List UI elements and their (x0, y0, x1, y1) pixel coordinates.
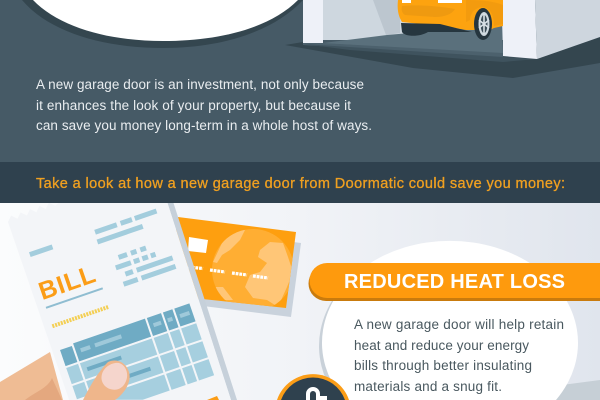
heading banner: reduced heat loss: REDUCED HEAT LOSS (344, 271, 565, 293)
heading banner: reduced heat loss (309, 263, 600, 301)
text bubble (319, 241, 578, 400)
illustration: credit card (165, 217, 301, 317)
icon: thermometer badge (277, 374, 349, 400)
illustration: bill receipt (8, 203, 237, 400)
body text: reduced heat loss: heat and reduce your energy (354, 338, 529, 353)
intro paragraph (36, 77, 372, 133)
hero white ellipse with shadow (22, 0, 303, 48)
bill date (52, 307, 108, 326)
body text: reduced heat loss: bills through better insulating (354, 358, 532, 373)
band heading: Take a look at how a new garage door from Doormatic could save you money: (36, 176, 565, 192)
body text: reduced heat loss (354, 317, 564, 394)
panel: intro dark section (0, 0, 600, 163)
intro paragraph: can save you money long-term in a whole host of ways. (36, 118, 372, 133)
orange corner (207, 396, 219, 400)
bill header lines (29, 209, 176, 287)
intro paragraph: A new garage door is an investment, not only because (36, 77, 364, 92)
illustration: hand holding bill (0, 352, 130, 400)
car (398, 0, 503, 40)
panel: reduced heat loss section background (0, 202, 600, 400)
thermometer glyph (306, 387, 327, 400)
body text: reduced heat loss: materials and a snug fit. (354, 379, 502, 394)
bill title: BILL (35, 260, 99, 306)
bill table (60, 303, 214, 400)
panel: header band (0, 162, 600, 203)
illustration: garage with car (285, 0, 600, 78)
intro paragraph: it enhances the look of your property, but because it (36, 98, 351, 113)
body text: reduced heat loss: A new garage door will help retain (354, 317, 564, 332)
